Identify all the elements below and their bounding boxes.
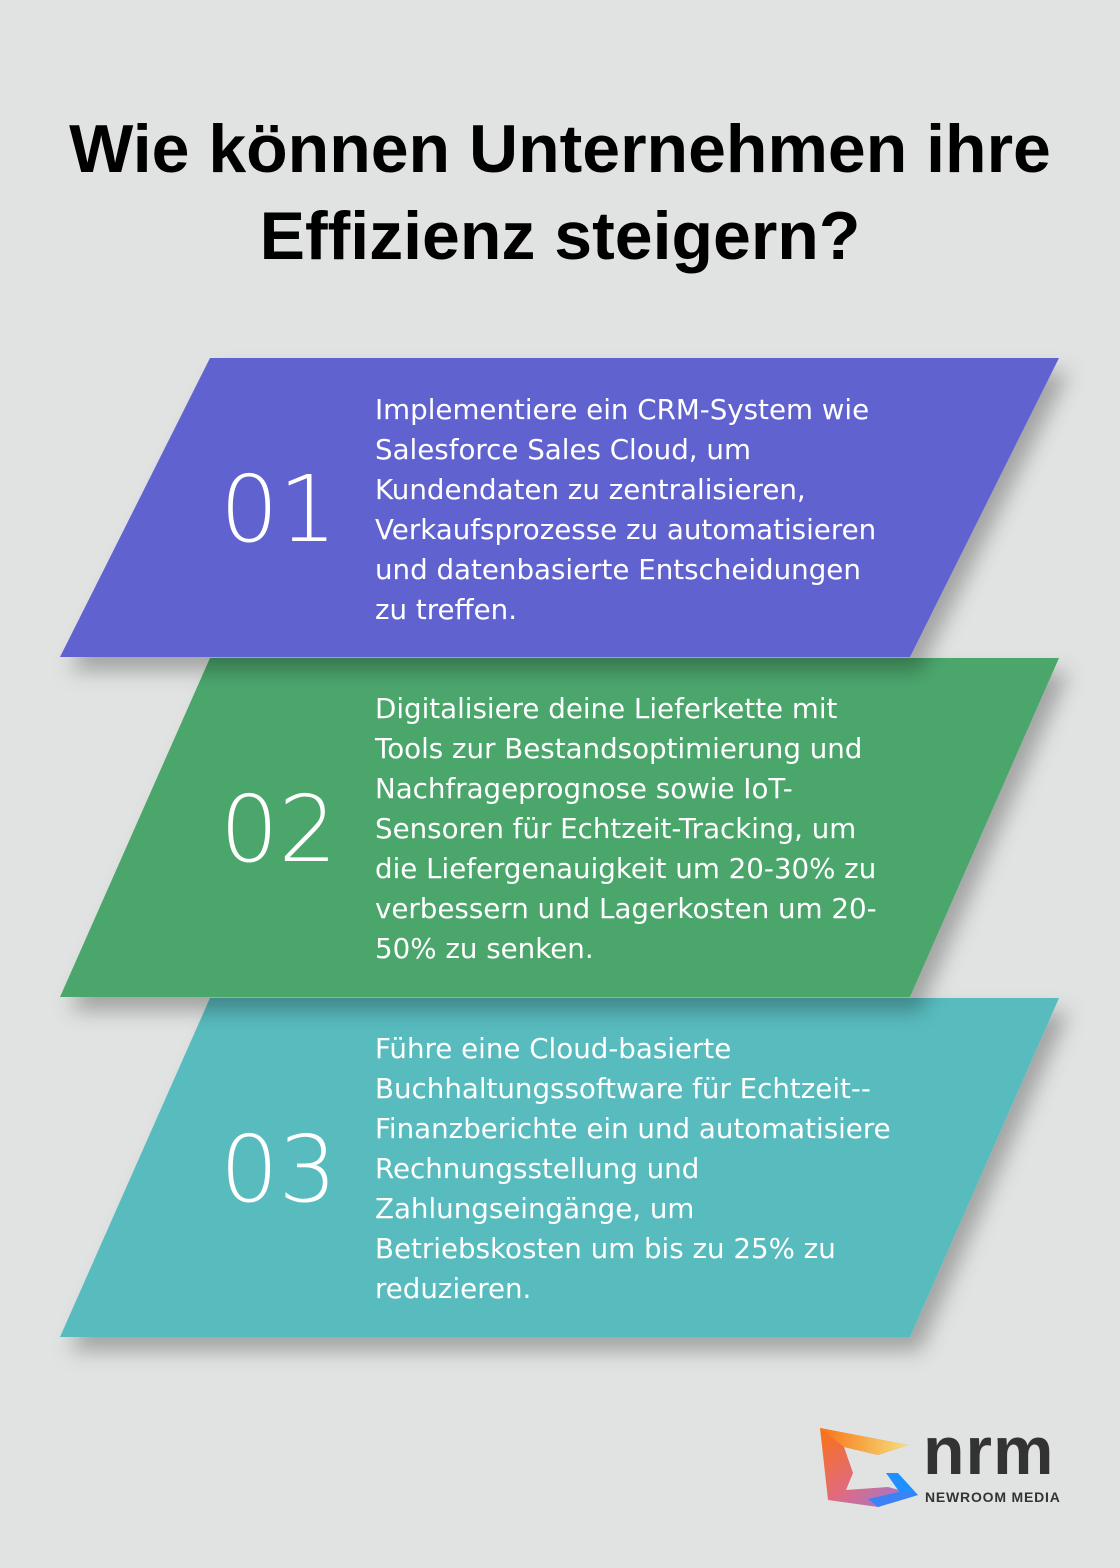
text 3: Rechnungsstellung und	[375, 1152, 699, 1185]
text 3: Betriebskosten um bis zu 25% zu	[375, 1232, 836, 1265]
title: Effizienz steigern?	[260, 198, 860, 274]
logo	[820, 1413, 1061, 1507]
logo: NEWROOM MEDIA	[925, 1489, 1061, 1505]
logo text: nrm	[923, 1413, 1054, 1489]
text 2: Nachfrageprognose sowie IoT-	[375, 772, 793, 805]
text 2: Digitalisiere deine Lieferkette mit	[375, 692, 837, 725]
panel 3	[220, 1032, 891, 1305]
text 2: Tools zur Bestandsoptimierung und	[375, 732, 862, 765]
text 3: reduzieren.	[375, 1272, 531, 1305]
panel 1	[220, 393, 876, 626]
text 3: Finanzberichte ein und automatisiere	[375, 1112, 891, 1145]
text 1: Kundendaten zu zentralisieren,	[375, 473, 806, 506]
text 1: zu treffen.	[375, 593, 517, 626]
text 2	[374, 692, 877, 965]
text 1: und datenbasierte Entscheidungen	[375, 553, 861, 586]
text 3: Führe eine Cloud-basierte	[375, 1032, 731, 1065]
text 2: die Liefergenauigkeit um 20-30% zu	[375, 852, 876, 885]
number 02: 02	[220, 776, 337, 883]
text 1: Implementiere ein CRM-System wie	[375, 393, 869, 426]
number 03: 03	[220, 1116, 337, 1223]
text 2: 50% zu senken.	[375, 932, 594, 965]
text 1	[375, 393, 876, 626]
text 3	[375, 1032, 891, 1305]
title: Wie können Unternehmen ihre	[69, 111, 1051, 187]
text 1: Salesforce Sales Cloud, um	[375, 433, 751, 466]
text 1: Verkaufsprozesse zu automatisieren	[375, 513, 876, 546]
text 2: verbessern und Lagerkosten um 20-	[375, 892, 877, 925]
logo icon	[820, 1428, 918, 1507]
title	[69, 111, 1051, 274]
panel 2	[220, 692, 877, 965]
text 2: Sensoren für Echtzeit-Tracking, um	[375, 812, 856, 845]
number 01: 01	[220, 456, 337, 563]
text 3: Buchhaltungssoftware für Echtzeit--	[375, 1072, 871, 1105]
text 3: Zahlungseingänge, um	[375, 1192, 694, 1225]
